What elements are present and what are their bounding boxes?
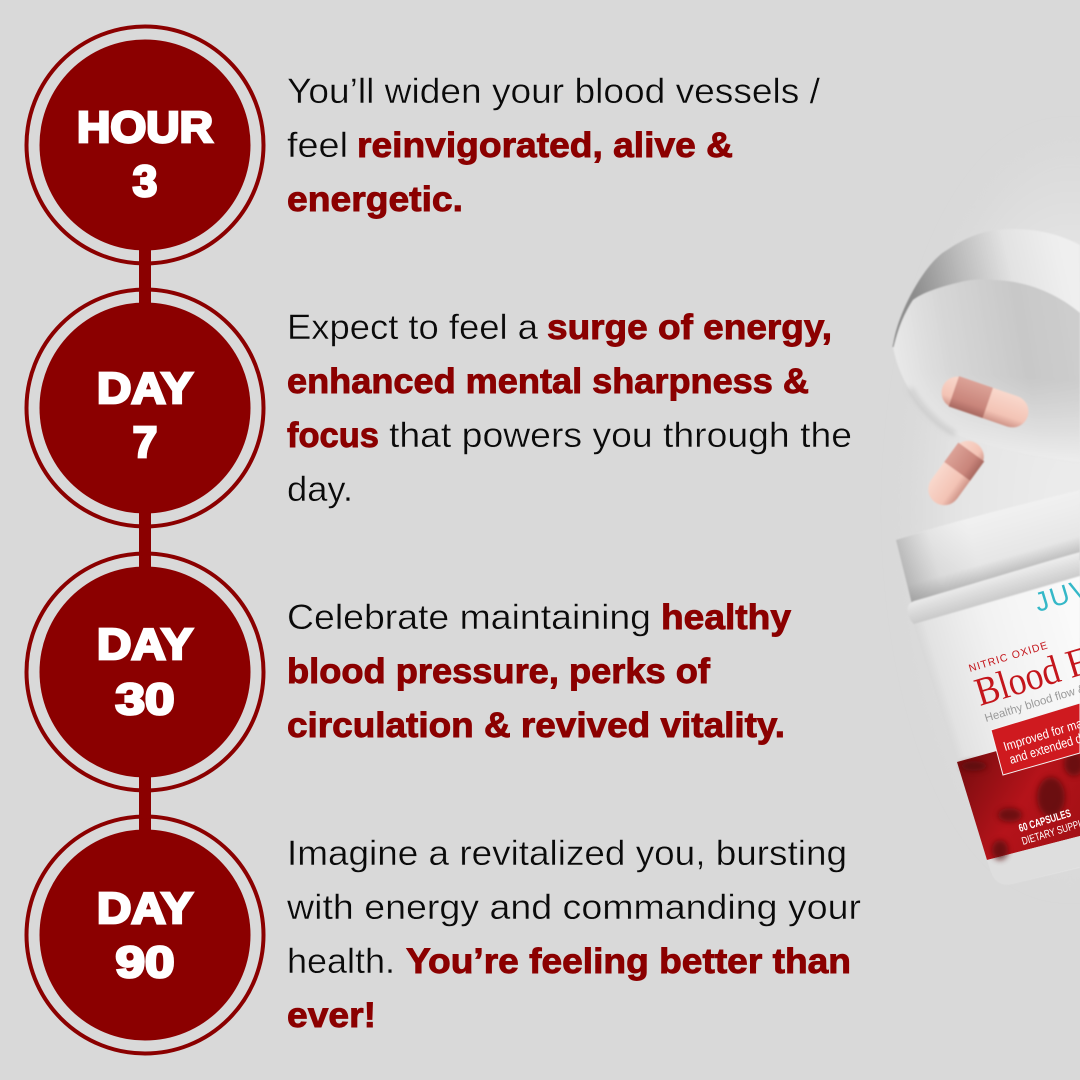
timeline node: day 7: 7 [133, 418, 157, 467]
blood cells [961, 752, 1080, 860]
timeline node: hour 3: HOUR [77, 103, 213, 152]
background glow [905, 140, 1080, 880]
timeline node: day 7: DAY [97, 364, 193, 413]
timeline connector [139, 145, 151, 935]
red callout box [991, 703, 1080, 775]
text block: day 90: ever! [287, 996, 376, 1035]
text block: day 30: Celebrate maintaining [287, 598, 651, 637]
text block: day 7: that powers you through the [389, 416, 852, 455]
text block: day 7 [287, 308, 852, 509]
text block: day 90: Imagine a revitalized you, bursting [287, 834, 847, 873]
text block: hour 3: You’ll widen your blood vessels / [287, 72, 820, 111]
red label band [957, 728, 1080, 860]
timeline node: hour 3: 3 [133, 157, 157, 206]
timeline node: day 7 [26, 290, 264, 526]
text block: day 7: day. [287, 470, 353, 509]
text block: day 30: circulation & revived vitality. [287, 706, 785, 745]
text block: day 90 [286, 834, 861, 1035]
text block: hour 3 [287, 72, 820, 219]
text block: day 90: health. [287, 942, 395, 981]
timeline node: day 90: 90 [116, 938, 174, 987]
timeline node: day 90 [26, 816, 264, 1054]
product image: open supplement bottle [893, 140, 1080, 884]
text block: day 90: You’re feeling better than [406, 942, 851, 981]
text block: hour 3: energetic. [287, 180, 463, 219]
text block: day 30: blood pressure, perks of [287, 652, 710, 691]
label text: NITRIC OXIDE [967, 639, 1050, 675]
text block: hour 3: reinvigorated, alive & [357, 126, 733, 165]
bottle neck [896, 490, 1080, 604]
text block: day 90: with energy and commanding your [286, 888, 861, 927]
text block: day 7: Expect to feel a [287, 308, 539, 347]
capsule: upper [937, 372, 1033, 432]
bottle base [987, 836, 1080, 884]
bottle lid [893, 229, 1080, 463]
text block: day 7: surge of energy, [547, 308, 832, 347]
timeline node: day 30: 30 [116, 675, 174, 724]
timeline node: day 90: DAY [97, 884, 193, 933]
text block: day 30: healthy [661, 598, 792, 637]
timeline node: day 30 [26, 554, 264, 790]
text block: day 30 [287, 598, 792, 745]
text block: day 7: enhanced mental sharpness & [287, 362, 809, 401]
text block: day 7: focus [287, 416, 379, 455]
timeline node: hour 3 [26, 26, 264, 264]
label text [967, 567, 1080, 725]
timeline node: day 30: DAY [97, 620, 193, 669]
text block: hour 3: feel [287, 126, 348, 165]
capsule: lower [922, 434, 990, 512]
bottle body [908, 552, 1080, 884]
